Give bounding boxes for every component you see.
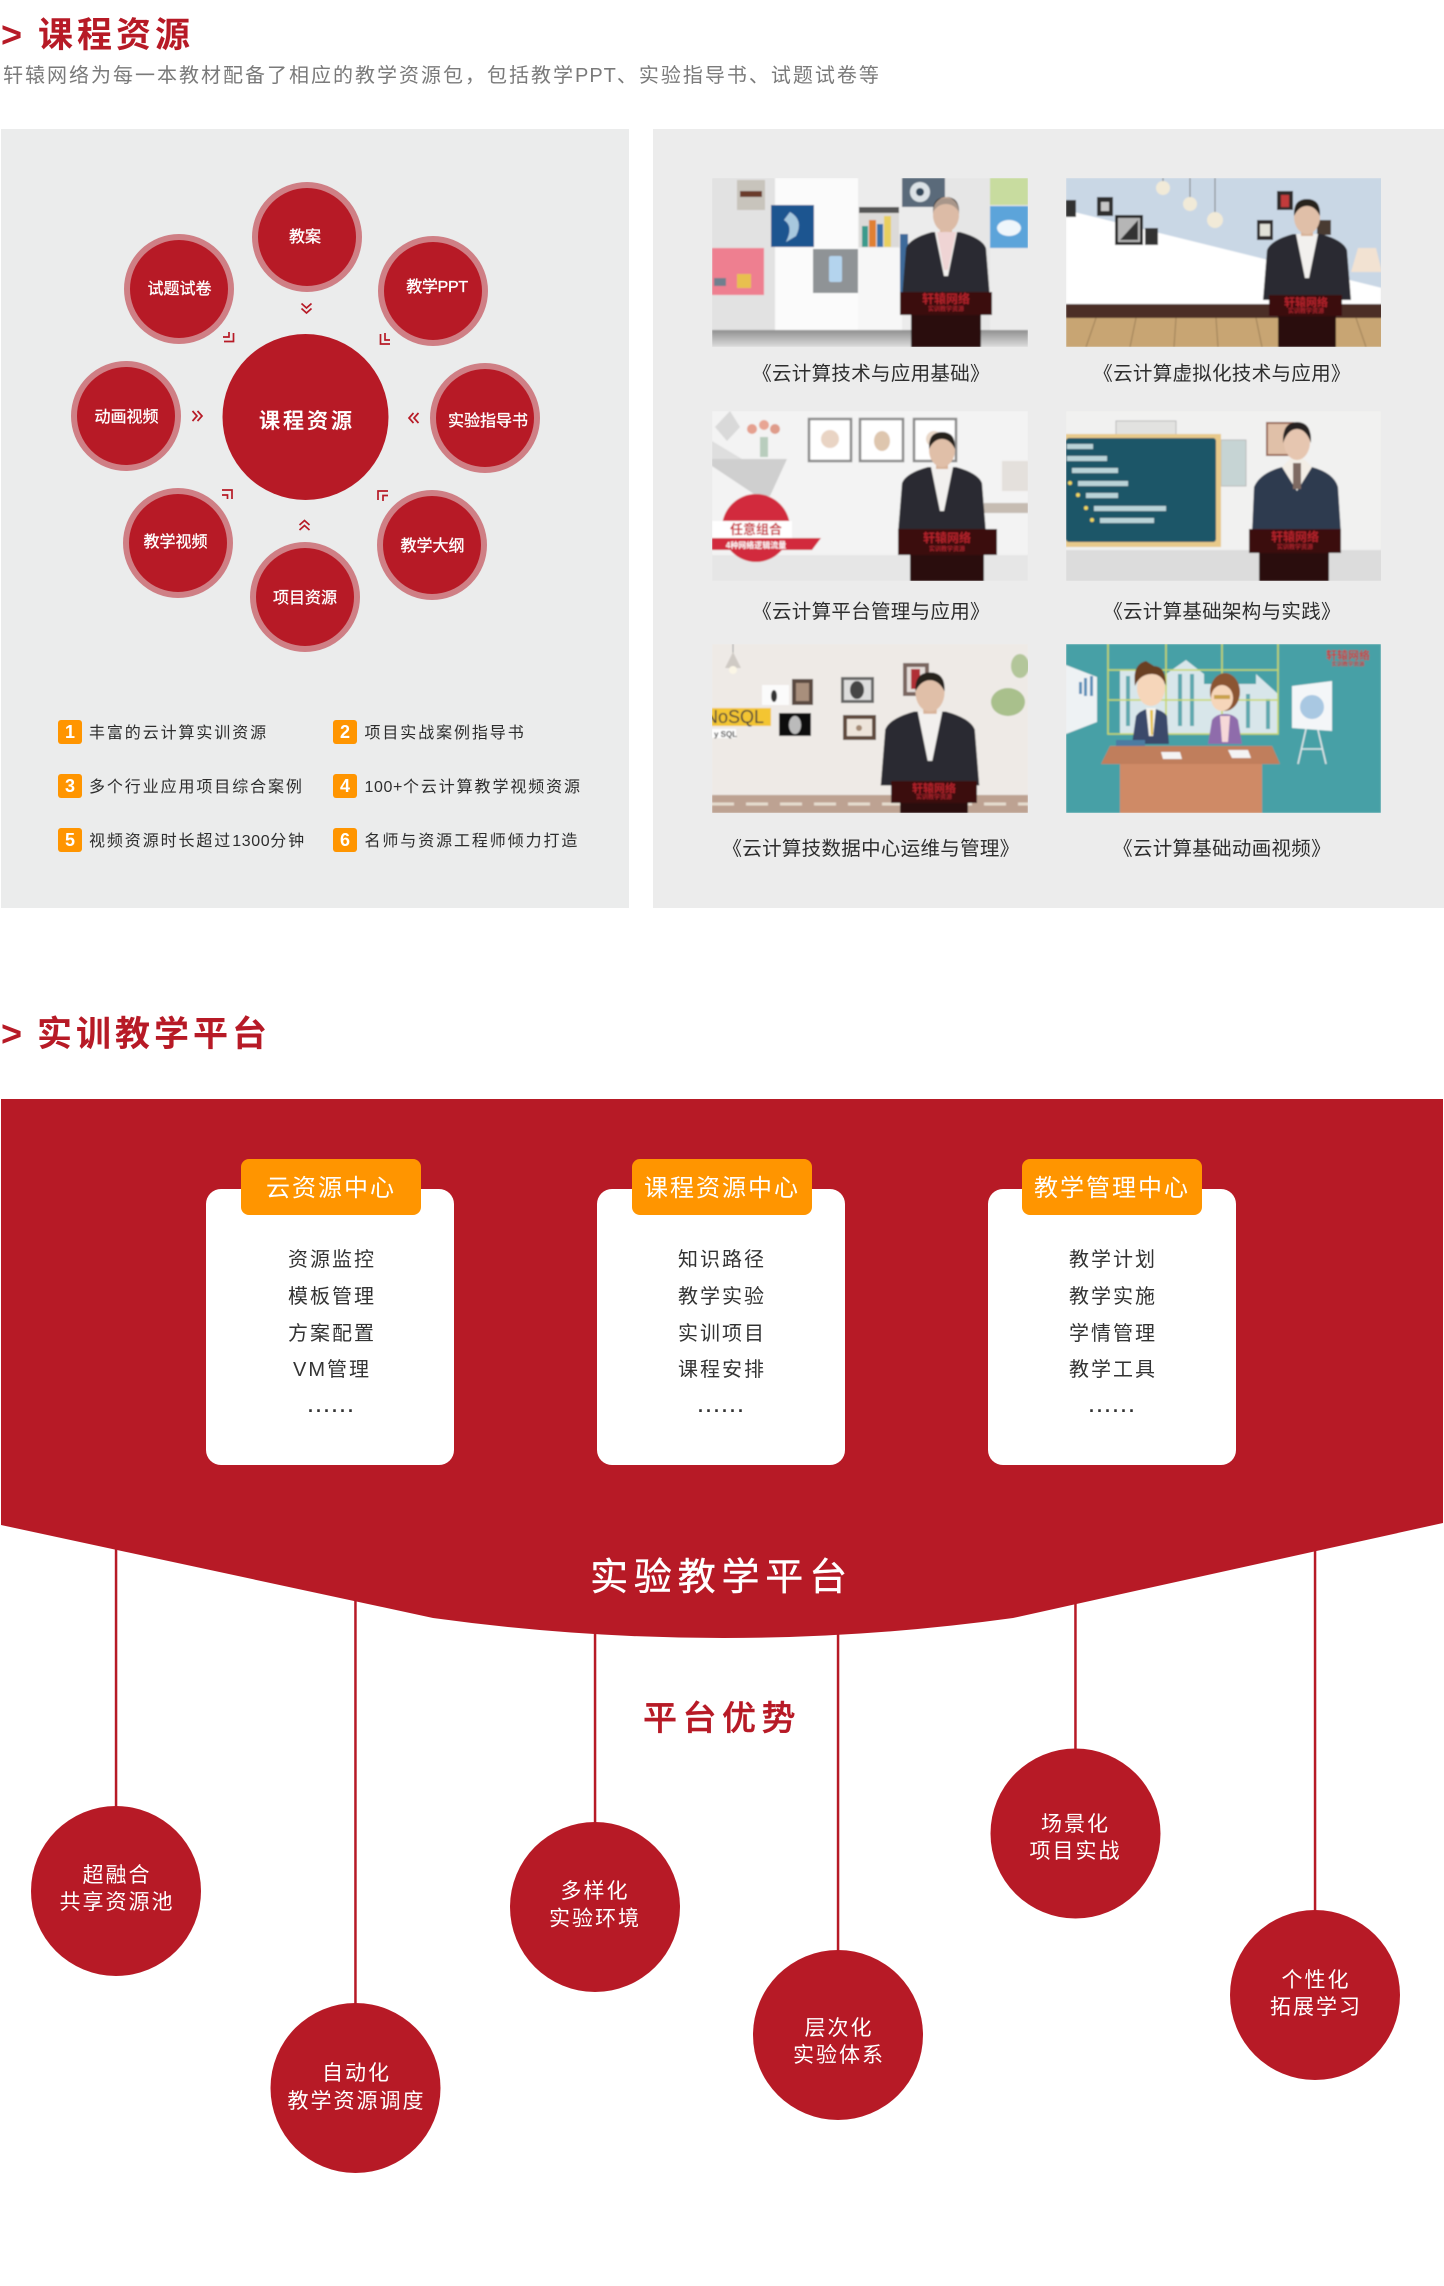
node: 教案: 教案 <box>289 228 321 246</box>
node: 教学视频 <box>126 491 230 595</box>
advantage 6 <box>1230 1910 1400 2080</box>
video still 3: 实训教学资源 <box>929 545 965 553</box>
video still 3: 4种网络逻辑流量 <box>726 540 786 550</box>
card: course resource center <box>597 1159 845 1465</box>
node: 教案 <box>255 185 359 289</box>
advantage 3: 实验环境 <box>549 1908 641 1930</box>
list item 5: 5 <box>65 830 75 850</box>
caption 4: 《云计算基础架构与实践》 <box>1103 601 1341 623</box>
advantage 1: 超融合 <box>82 1864 152 1887</box>
card: teaching management center <box>988 1159 1236 1465</box>
list item 1 <box>58 720 268 744</box>
advantage 2 <box>270 2003 440 2173</box>
video still 5: NoSQL <box>705 707 764 727</box>
list item 4: 4 <box>340 776 350 796</box>
advantage 5 <box>990 1748 1160 1918</box>
card: teaching management center: 教学实施 <box>1069 1285 1157 1308</box>
section heading: 课程资源: 课程资源 <box>38 16 194 55</box>
list item 3 <box>58 774 304 798</box>
video still 1 <box>712 178 1028 347</box>
video still 5: 轩辕网络 <box>912 781 956 795</box>
video still 5: 实训教学资源 <box>916 793 952 801</box>
arrow: upper right <box>380 333 390 344</box>
list item 1: 1 <box>65 722 75 742</box>
caption 3: 《云计算平台管理与应用》 <box>752 601 990 623</box>
center circle <box>222 334 388 500</box>
video still 6: animation: 轩辕网络 <box>1326 648 1370 662</box>
advantage 4 <box>753 1950 923 2120</box>
caption 5: 《云计算技数据中心运维与管理》 <box>722 838 1020 860</box>
card: cloud resource center: 方案配置 <box>288 1322 376 1345</box>
card: cloud resource center: 资源监控 <box>288 1248 376 1271</box>
list item 6: 名师与资源工程师倾力打造 <box>364 832 579 850</box>
section heading: 课程资源: > <box>1 14 22 55</box>
advantage 5: 项目实战 <box>1030 1840 1122 1863</box>
caption 2: 《云计算虚拟化技术与应用》 <box>1093 363 1351 385</box>
advantage 2: 教学资源调度 <box>288 2090 426 2113</box>
advantage 2: 自动化 <box>322 2062 391 2085</box>
card: course resource center: 课程安排 <box>678 1358 766 1381</box>
node: 教学PPT <box>381 239 485 343</box>
arrow: top <box>302 304 312 313</box>
arrow: lower right <box>378 491 388 501</box>
card: cloud resource center: 云资源中心 <box>266 1175 396 1202</box>
list item 2: 2 <box>340 722 350 742</box>
node: 实验指导书: 实验指导书 <box>448 412 528 430</box>
card: course resource center: 教学实验 <box>678 1285 766 1308</box>
panel: video courses <box>653 129 1444 908</box>
arrow: upper left <box>223 332 234 342</box>
advantage 3 <box>510 1822 680 1992</box>
node: 动画视频: 动画视频 <box>94 408 159 426</box>
card: course resource center: 知识路径 <box>678 1248 766 1271</box>
list item 2 <box>333 720 526 744</box>
list item 6: 6 <box>340 830 350 850</box>
card: course resource center: 课程资源中心 <box>644 1175 800 1202</box>
card: cloud resource center <box>206 1159 454 1465</box>
video still 3: 轩辕网络 <box>923 530 971 545</box>
banner: experimental teaching platform: 实验教学平台 <box>590 1557 853 1599</box>
video still 4 <box>1066 420 1381 581</box>
node: 项目资源 <box>253 545 357 649</box>
node: 实验指导书 <box>433 366 537 470</box>
section heading: 实训教学平台: > <box>1 1013 22 1054</box>
node: 教学PPT: 教学PPT <box>406 278 468 296</box>
card: cloud resource center: ...... <box>308 1396 356 1416</box>
video still 4: 实训教学资源 <box>1277 543 1313 551</box>
caption 1: 《云计算技术与应用基础》 <box>752 363 990 385</box>
video still 3: 任意组合 <box>730 522 782 537</box>
list item 4: 100+个云计算教学视频资源 <box>364 777 582 796</box>
advantage 1: 共享资源池 <box>60 1891 174 1914</box>
video still 1: 实训教学资源 <box>928 305 964 313</box>
arrow: right <box>409 413 418 423</box>
intro text: 轩辕网络为每一本教材配备了相应的教学资源包，包括教学PPT、实验指导书、试题试卷等 <box>3 64 881 87</box>
list item 5 <box>58 828 306 852</box>
card: course resource center: 实训项目 <box>678 1322 766 1345</box>
video still 2 <box>1066 178 1381 347</box>
section heading: 实训教学平台: 实训教学平台 <box>37 1015 271 1054</box>
node: 教学视频: 教学视频 <box>143 533 208 551</box>
card: cloud resource center: VM管理 <box>293 1358 371 1381</box>
arrow: lower left <box>222 490 232 499</box>
list item 3: 多个行业应用项目综合案例 <box>89 777 304 796</box>
card: teaching management center: 教学计划 <box>1069 1248 1157 1271</box>
video still 3 <box>712 412 1028 581</box>
card: teaching management center: 学情管理 <box>1069 1322 1157 1345</box>
list item 3: 3 <box>65 776 75 796</box>
advantage 6: 个性化 <box>1282 1969 1350 1992</box>
node: 试题试卷 <box>127 237 231 341</box>
card: teaching management center: ...... <box>1089 1396 1137 1416</box>
list item 1: 丰富的云计算实训资源 <box>89 723 268 742</box>
card: teaching management center: 教学管理中心 <box>1034 1175 1190 1202</box>
advantage 5: 场景化 <box>1041 1813 1110 1836</box>
list item 5: 视频资源时长超过1300分钟 <box>89 832 306 850</box>
video still 5: y SQL <box>714 730 737 739</box>
heading: platform advantages: 平台优势 <box>643 1700 801 1738</box>
node: 动画视频 <box>74 364 178 468</box>
panel: course resources diagram <box>1 129 629 908</box>
video still 5 <box>705 644 1028 813</box>
card: course resource center: ...... <box>698 1396 746 1416</box>
advantage 3: 多样化 <box>560 1880 630 1903</box>
video still 4: 轩辕网络 <box>1271 529 1319 544</box>
arrow: bottom <box>300 520 310 530</box>
video still 6: animation: 实训教学资源 <box>1331 660 1365 668</box>
list item 6 <box>333 828 579 852</box>
banner: experimental teaching platform <box>1 1099 1443 1638</box>
list item 2: 项目实战案例指导书 <box>364 724 526 742</box>
video still 6: animation <box>1066 644 1381 813</box>
advantage 4: 层次化 <box>804 2017 874 2040</box>
connector lines <box>115 1500 1316 2007</box>
card: cloud resource center: 模板管理 <box>288 1285 376 1308</box>
advantage 4: 实验体系 <box>793 2044 885 2067</box>
advantage 6: 拓展学习 <box>1270 1996 1362 2019</box>
advantage 1 <box>31 1806 201 1976</box>
video still 2: 实训教学资源 <box>1288 307 1324 315</box>
node: 项目资源: 项目资源 <box>273 589 337 607</box>
video still 1: 轩辕网络 <box>922 291 970 306</box>
video still 2: 轩辕网络 <box>1284 295 1328 309</box>
node: 教学大纲: 教学大纲 <box>400 537 465 555</box>
node: 教学大纲 <box>380 493 484 597</box>
node: 试题试卷: 试题试卷 <box>147 280 212 298</box>
list item 4 <box>333 774 582 798</box>
caption 6: 《云计算基础动画视频》 <box>1113 838 1331 860</box>
arrow: left <box>192 411 202 421</box>
card: teaching management center: 教学工具 <box>1069 1358 1157 1381</box>
center circle: 课程资源 <box>259 410 355 433</box>
